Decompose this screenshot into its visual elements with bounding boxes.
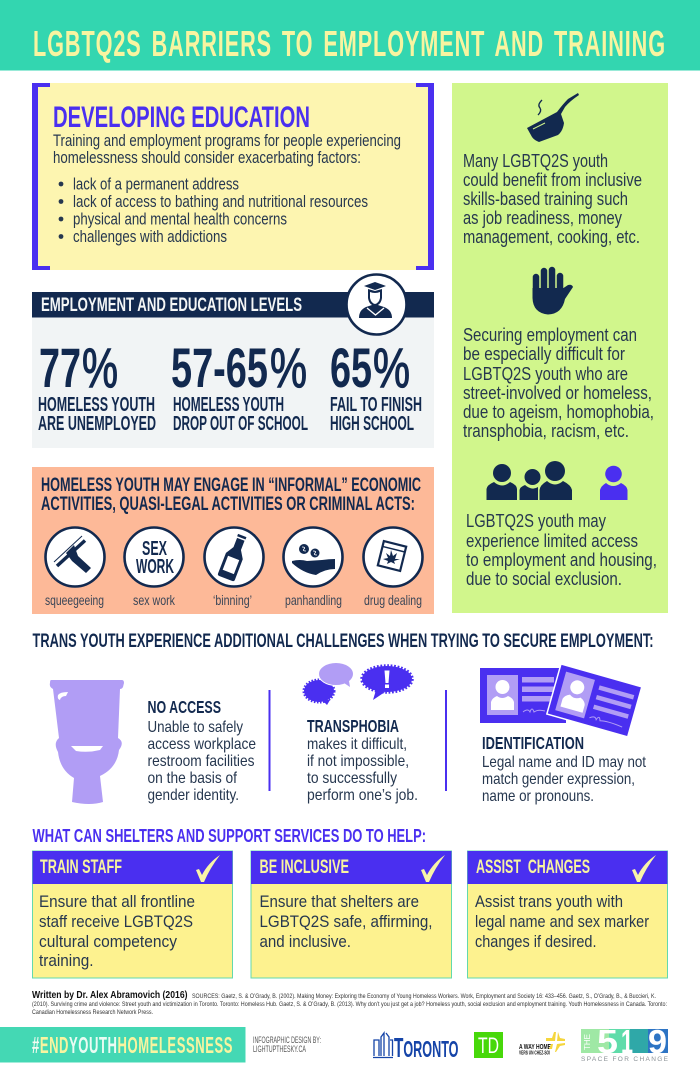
icon: toilet bbox=[50, 680, 124, 804]
text: no access: NO ACCESS bbox=[148, 697, 221, 717]
icon labels: sex work bbox=[133, 592, 176, 608]
section: transphobia: if not impossible, bbox=[307, 753, 409, 770]
card text: LGBTQ2S safe, affirming, bbox=[260, 912, 432, 931]
stat: 65%: 65 bbox=[330, 336, 372, 399]
icon: panhandling hand bbox=[284, 528, 342, 586]
card text: training. bbox=[39, 951, 94, 970]
stat: 65%: % bbox=[373, 336, 410, 399]
text: skills training: management, cooking, etc. bbox=[463, 227, 640, 247]
text: securing employment: due to ageism, homophobia, bbox=[463, 402, 654, 422]
logo: The 519: 9 bbox=[648, 1023, 667, 1060]
icon: sex work: SEX bbox=[142, 538, 167, 560]
text: securing employment: transphobia, racism, etc. bbox=[463, 421, 629, 441]
stat: 57-65%: DROP OUT OF SCHOOL bbox=[173, 413, 308, 435]
stat: 57-65%: HOMELESS YOUTH bbox=[173, 394, 284, 416]
section: identification bbox=[480, 664, 646, 805]
heading: informal activities: ACTIVITIES, QUASI-LEGAL ACTIVITIES OR CRIMINAL ACTS: bbox=[41, 494, 415, 515]
icon: frying pan bbox=[527, 93, 579, 142]
heading: developing education: DEVELOPING EDUCATION bbox=[53, 101, 310, 134]
bullet list: lack of access to bathing and nutritional resources bbox=[73, 193, 368, 211]
text: social exclusion: due to social exclusion. bbox=[466, 569, 622, 589]
card: be inclusive bbox=[251, 851, 452, 978]
logo: The 519: THE bbox=[583, 1034, 592, 1050]
stat: 57-65%: 57-65 bbox=[171, 336, 268, 399]
logo: The 519: SPACE FOR CHANGE bbox=[581, 1056, 669, 1063]
stat: 77%: 77 bbox=[39, 336, 81, 399]
card: assist changes: ASSIST CHANGES bbox=[476, 857, 590, 878]
icon labels: ‘binning’ bbox=[213, 592, 252, 608]
section: transphobia: makes it difficult, bbox=[307, 736, 407, 753]
text: skills training: skills-based training such bbox=[463, 189, 628, 209]
section: no access bbox=[50, 680, 256, 804]
stat: 77%: % bbox=[82, 336, 118, 399]
panel: developing education bbox=[32, 83, 434, 270]
logo: The 519: 5 bbox=[597, 1023, 618, 1060]
section: transphobia: perform one’s job. bbox=[307, 787, 418, 804]
icon: sex work bbox=[124, 528, 184, 586]
footer hashtag banner bbox=[0, 1027, 246, 1062]
text: identification: IDENTIFICATION bbox=[482, 733, 584, 753]
text: transphobia: TRANSPHOBIA bbox=[307, 716, 399, 736]
icon: sex work: WORK bbox=[136, 556, 174, 578]
panel: employment and education levels bbox=[32, 274, 434, 448]
card text: changes if desired. bbox=[475, 932, 596, 951]
icon: ID cards bbox=[480, 664, 642, 737]
design credit: INFOGRAPHIC DESIGN BY: bbox=[253, 1035, 321, 1045]
panel: right column bbox=[452, 83, 668, 613]
icon: graduate bbox=[346, 274, 406, 334]
section: no access: restroom facilities bbox=[148, 753, 254, 770]
stat: 77%: HOMELESS YOUTH bbox=[38, 394, 155, 416]
logo: Toronto: TORONTO bbox=[394, 1032, 458, 1063]
heading: informal activities: HOMELESS YOUTH MAY ENGAGE IN “INFORMAL” ECONOMIC bbox=[41, 475, 421, 496]
header banner bbox=[0, 0, 700, 70]
text: social exclusion: experience limited access bbox=[466, 531, 638, 551]
card text: Assist trans youth with bbox=[475, 892, 623, 911]
logo: A Way Home: A WAY HOME bbox=[519, 1042, 551, 1051]
icon labels: squeegeeing bbox=[45, 592, 104, 608]
card text: staff receive LGBTQ2S bbox=[39, 912, 193, 931]
card text: cultural competency bbox=[39, 932, 177, 951]
heading: employment and education levels: EMPLOYMENT AND EDUCATION LEVELS bbox=[41, 295, 302, 316]
text: securing employment: LGBTQ2S youth who are bbox=[463, 364, 628, 384]
icon labels: drug dealing bbox=[364, 592, 422, 608]
card: train staff bbox=[32, 851, 232, 978]
stat: 65%: HIGH SCHOOL bbox=[330, 413, 414, 435]
stat: 77% bbox=[38, 336, 156, 435]
logo: The 519: 1 bbox=[621, 1023, 633, 1060]
section: no access: Unable to safely bbox=[148, 719, 243, 736]
icon labels bbox=[45, 592, 422, 608]
icon: group of people with excluded person bbox=[486, 461, 628, 500]
intro text: homelessness should consider exacerbating factors: bbox=[53, 149, 361, 167]
intro text: Training and employment programs for people experiencing bbox=[53, 132, 401, 150]
stat: 65%: FAIL TO FINISH bbox=[330, 394, 422, 416]
section: transphobia bbox=[304, 662, 418, 804]
card text bbox=[39, 892, 195, 970]
text: skills training: could benefit from inclusive bbox=[463, 170, 642, 190]
icon: check mark bbox=[196, 855, 220, 882]
card: assist changes bbox=[468, 851, 668, 978]
text: skills training bbox=[463, 151, 642, 247]
text: securing employment: Securing employment can bbox=[463, 325, 637, 345]
logo: Toronto bbox=[373, 1032, 458, 1063]
bullet list: lack of a permanent address bbox=[73, 176, 239, 194]
footer hashtag banner: #ENDYOUTHHOMELESSNESS bbox=[32, 1032, 233, 1058]
logo: TD: TD bbox=[478, 1033, 499, 1058]
section: identification: match gender expression, bbox=[482, 771, 635, 788]
card text: Ensure that shelters are bbox=[260, 892, 419, 911]
heading: informal activities bbox=[41, 475, 421, 515]
card text: and inclusive. bbox=[260, 932, 351, 951]
bullet list: challenges with addictions bbox=[73, 228, 227, 246]
card text: Ensure that all frontline bbox=[39, 892, 195, 911]
logo: A Way Home bbox=[519, 1032, 565, 1056]
icon: speech bubbles bbox=[304, 662, 412, 705]
card text: legal name and sex marker bbox=[475, 912, 649, 931]
text: skills training: as job readiness, money bbox=[463, 208, 622, 228]
credits and sources: Written by Dr. Alex Abramovich (2016) bbox=[32, 989, 188, 1001]
bullet list: physical and mental health concerns bbox=[73, 210, 287, 228]
section: no access: access workplace bbox=[148, 736, 256, 753]
intro text bbox=[53, 132, 401, 167]
card text bbox=[260, 892, 432, 951]
section: no access: on the basis of bbox=[148, 770, 237, 787]
icon: check mark bbox=[632, 855, 656, 882]
icon: bottle bbox=[204, 528, 264, 586]
text: skills training: Many LGBTQ2S youth bbox=[463, 151, 608, 171]
stat: 57-65%: % bbox=[270, 336, 307, 399]
text: social exclusion: LGBTQ2S youth may bbox=[466, 511, 606, 531]
design credit: LIGHTUPTHESKY.CA bbox=[253, 1044, 306, 1054]
design credit bbox=[253, 1035, 321, 1054]
logo: The 519 bbox=[581, 1023, 669, 1063]
icon: drug bag bbox=[364, 528, 422, 586]
text: securing employment: street-involved or homeless, bbox=[463, 383, 652, 403]
bullet list bbox=[59, 176, 368, 246]
text: securing employment bbox=[463, 325, 654, 441]
icon: check mark bbox=[421, 855, 445, 882]
panel: informal economic activities bbox=[32, 467, 434, 614]
credits and sources bbox=[32, 989, 667, 1016]
icon: raised hand bbox=[532, 270, 573, 314]
icon labels: panhandling bbox=[285, 592, 342, 608]
section: transphobia: to successfully bbox=[307, 770, 397, 787]
stat: 77%: ARE UNEMPLOYED bbox=[38, 413, 156, 435]
stat: 65% bbox=[330, 336, 422, 435]
credits and sources: Canadian Homelessness Research Network Press. bbox=[32, 1009, 153, 1016]
stat: 57-65% bbox=[171, 336, 308, 435]
text: social exclusion: to employment and housing, bbox=[466, 550, 657, 570]
section: identification: name or pronouns. bbox=[482, 788, 594, 805]
section: no access: gender identity. bbox=[148, 787, 239, 804]
card: be inclusive: BE INCLUSIVE bbox=[260, 857, 349, 878]
card text bbox=[475, 892, 649, 951]
logo: A Way Home: VERS UN CHEZ-SOI bbox=[519, 1050, 550, 1056]
text: securing employment: be especially difficult for bbox=[463, 344, 625, 364]
icon: squeegee bbox=[46, 528, 104, 586]
text: social exclusion bbox=[466, 511, 657, 589]
section: identification: Legal name and ID may not bbox=[482, 754, 646, 771]
heading: what can shelters do: WHAT CAN SHELTERS AND SUPPORT SERVICES DO TO HELP: bbox=[32, 826, 426, 846]
card: train staff: TRAIN STAFF bbox=[40, 857, 122, 878]
